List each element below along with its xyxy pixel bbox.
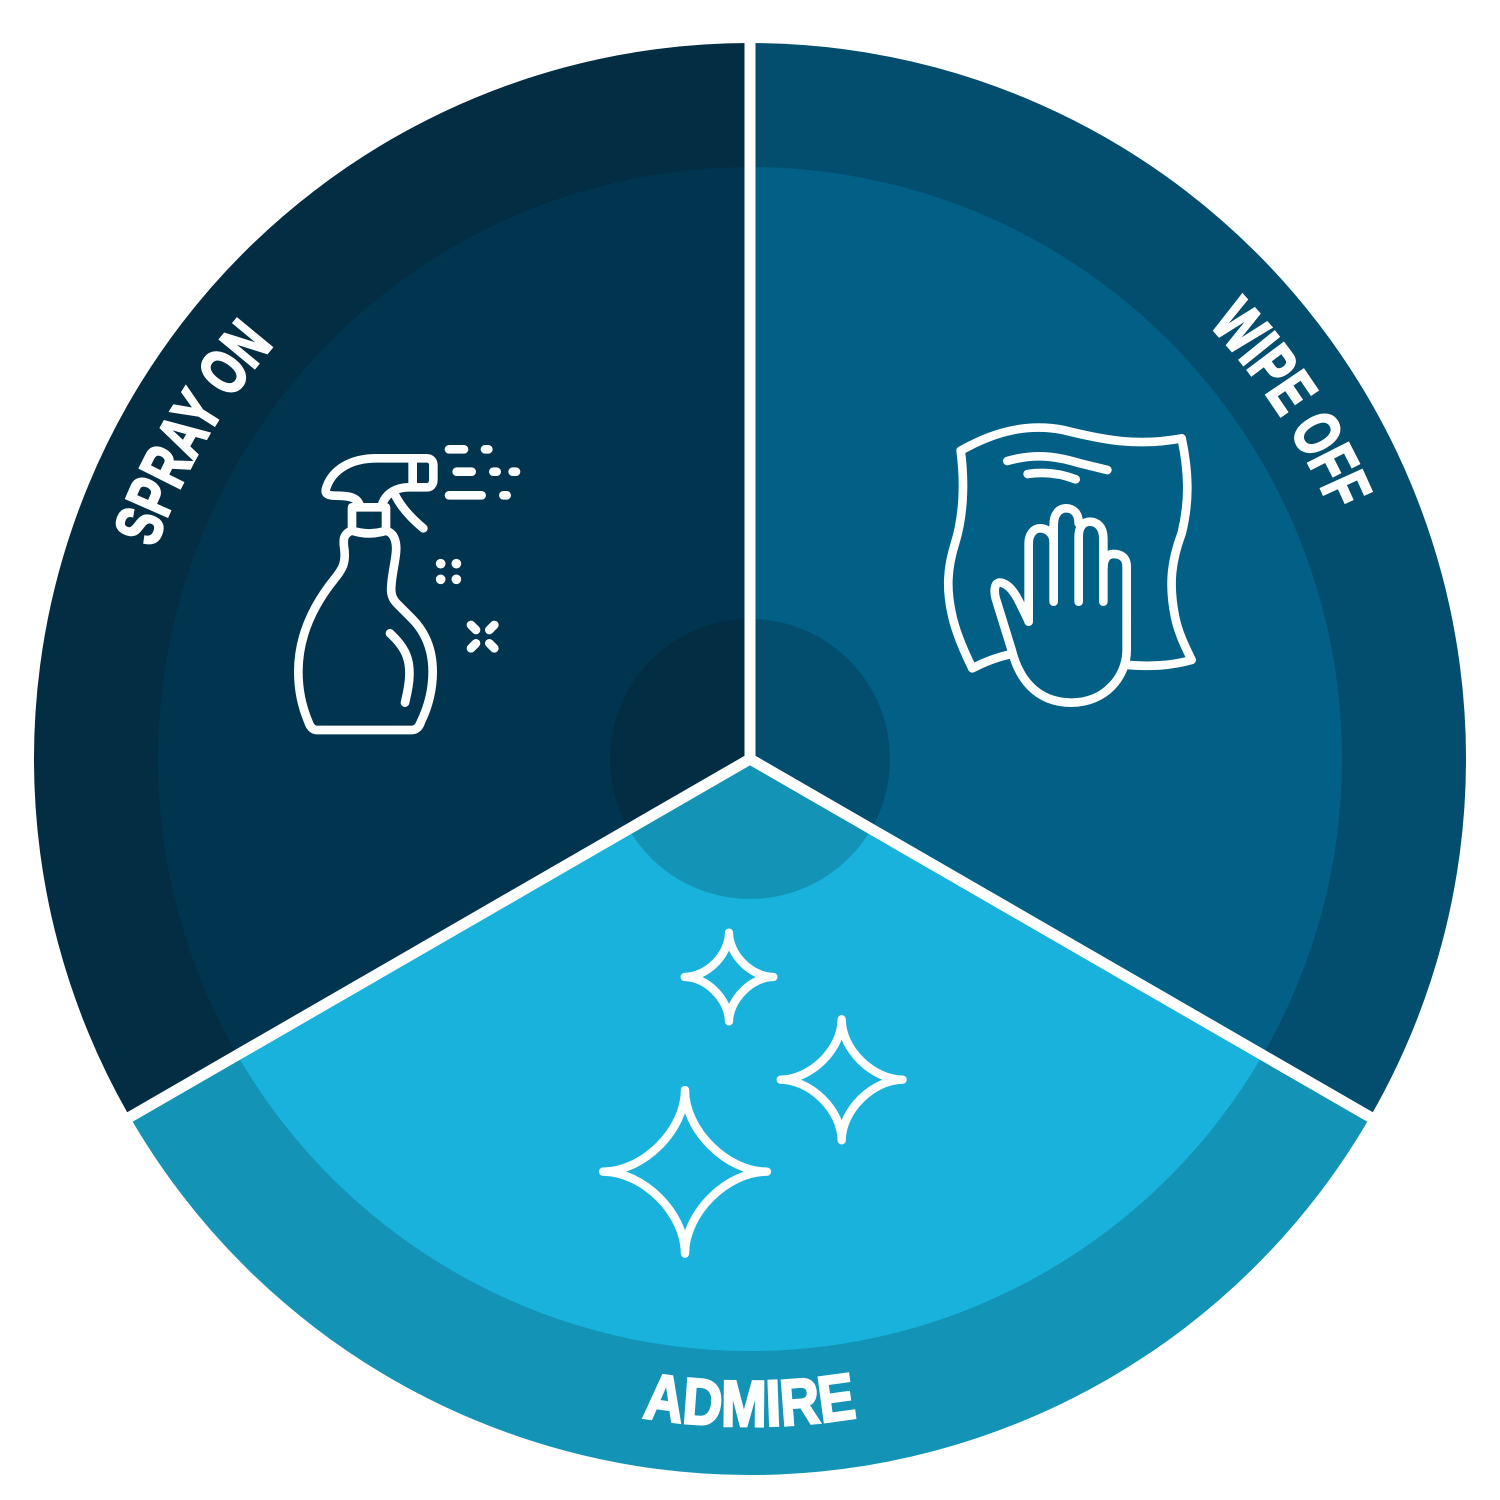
panel: spray on segment xyxy=(34,43,750,1117)
label: admire: ADMIRE xyxy=(642,1372,856,1428)
icon: hand wiping with cloth xyxy=(948,428,1192,703)
label: wipe off: WIPE OFF xyxy=(1212,292,1373,504)
panel: admire segment xyxy=(130,759,1370,1475)
icon: spray bottle xyxy=(298,449,516,730)
label: spray on: SPRAY ON xyxy=(116,317,274,544)
segment dividers xyxy=(110,20,1390,1128)
panel: wipe off segment xyxy=(750,43,1466,1117)
icon: sparkles xyxy=(603,933,903,1254)
